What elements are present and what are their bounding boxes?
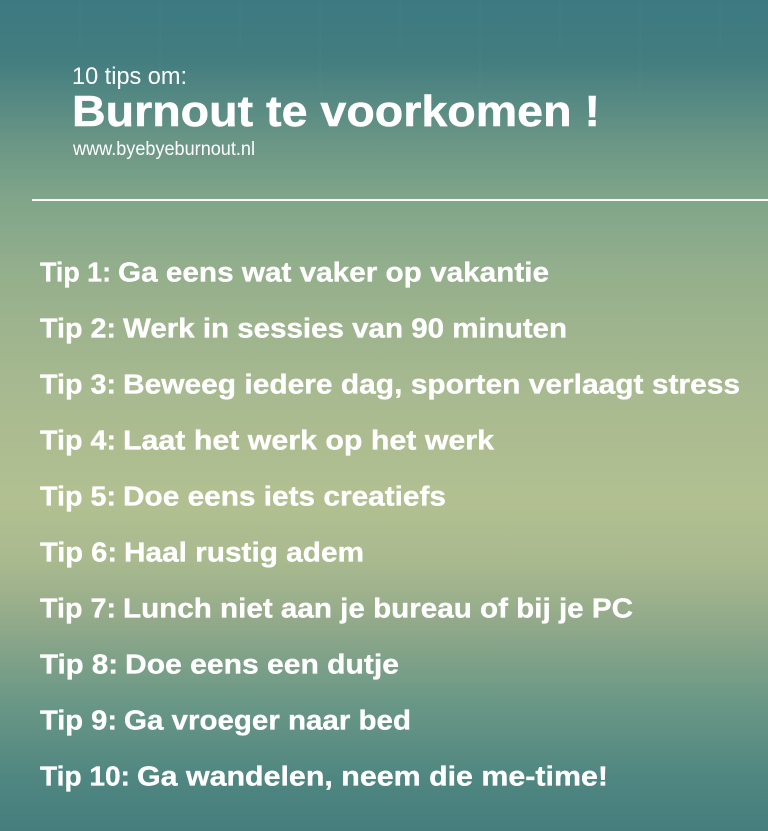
tip 6: Haal rustig adem bbox=[124, 536, 364, 568]
tip 10: Tip 10: bbox=[40, 760, 130, 792]
tip 1: Tip 1: bbox=[40, 256, 111, 288]
tip 6: Tip 6: bbox=[40, 536, 117, 568]
tip 9: Tip 9: bbox=[40, 704, 117, 736]
tip 5: Tip 5: bbox=[40, 480, 116, 512]
tip 2: Tip 2: bbox=[40, 312, 116, 344]
tip 3: Tip 3: bbox=[40, 368, 116, 400]
website url: www.byebyeburnout.nl bbox=[72, 139, 255, 160]
tip 5: Doe eens iets creatiefs bbox=[123, 480, 446, 512]
tip 3: Beweeg iedere dag, sporten verlaagt stress bbox=[123, 368, 740, 400]
tip 2: Werk in sessies van 90 minuten bbox=[123, 312, 567, 344]
tip 9: Ga vroeger naar bed bbox=[124, 704, 411, 736]
title: Burnout te voorkomen ! bbox=[72, 87, 600, 136]
tip 8: Doe eens een dutje bbox=[125, 648, 399, 680]
tip 10: Ga wandelen, neem die me-time! bbox=[137, 760, 608, 792]
tip 7: Lunch niet aan je bureau of bij je PC bbox=[123, 592, 633, 624]
tip 6 bbox=[40, 536, 364, 568]
tip 1: Ga eens wat vaker op vakantie bbox=[118, 256, 549, 288]
tips list bbox=[40, 256, 740, 792]
subtitle: 10 tips om: bbox=[72, 63, 187, 90]
tip 8: Tip 8: bbox=[40, 648, 118, 680]
tip 7: Tip 7: bbox=[40, 592, 116, 624]
tip 4: Laat het werk op het werk bbox=[123, 424, 494, 456]
tip 4: Tip 4: bbox=[40, 424, 116, 456]
